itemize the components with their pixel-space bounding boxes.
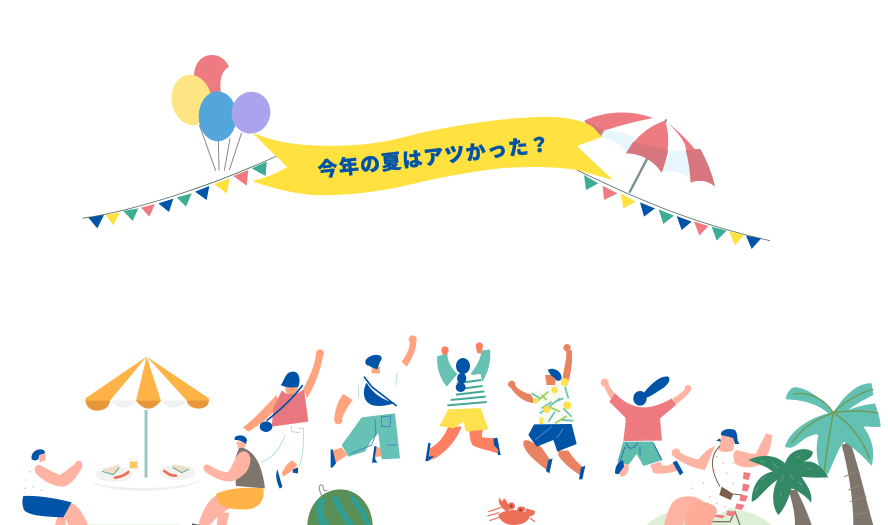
jumping woman with pink top — [243, 349, 324, 488]
cafe table scene — [22, 357, 265, 525]
dress — [690, 448, 740, 515]
banner title: 今年の夏はアツかった？ — [316, 132, 552, 182]
jumping woman with striped shirt — [425, 342, 501, 461]
chair stripes — [714, 472, 751, 518]
seated woman — [22, 449, 88, 525]
jumping woman with ponytail — [601, 376, 691, 477]
bunting left — [83, 156, 277, 228]
small palm tree — [748, 449, 828, 525]
crab — [487, 498, 535, 525]
ground patch — [87, 523, 180, 525]
table parasol — [85, 357, 209, 478]
crossbody bag — [712, 446, 742, 495]
large palm tree — [785, 383, 881, 525]
bunting right — [577, 170, 770, 249]
balloons — [168, 55, 274, 171]
watermelon — [307, 485, 373, 525]
green hill — [647, 507, 772, 525]
bicycle frame — [682, 512, 740, 525]
beach parasol — [584, 113, 715, 193]
jumping man with aloha shirt — [508, 344, 585, 479]
head — [718, 435, 735, 452]
legs — [664, 496, 703, 525]
seated man — [192, 435, 265, 525]
jumping man with waist bag — [331, 335, 417, 468]
yellow ribbon banner — [252, 117, 613, 195]
arms — [672, 446, 715, 470]
jumping people group — [243, 335, 501, 488]
table with food — [88, 458, 203, 491]
woman on bicycle — [647, 429, 772, 525]
